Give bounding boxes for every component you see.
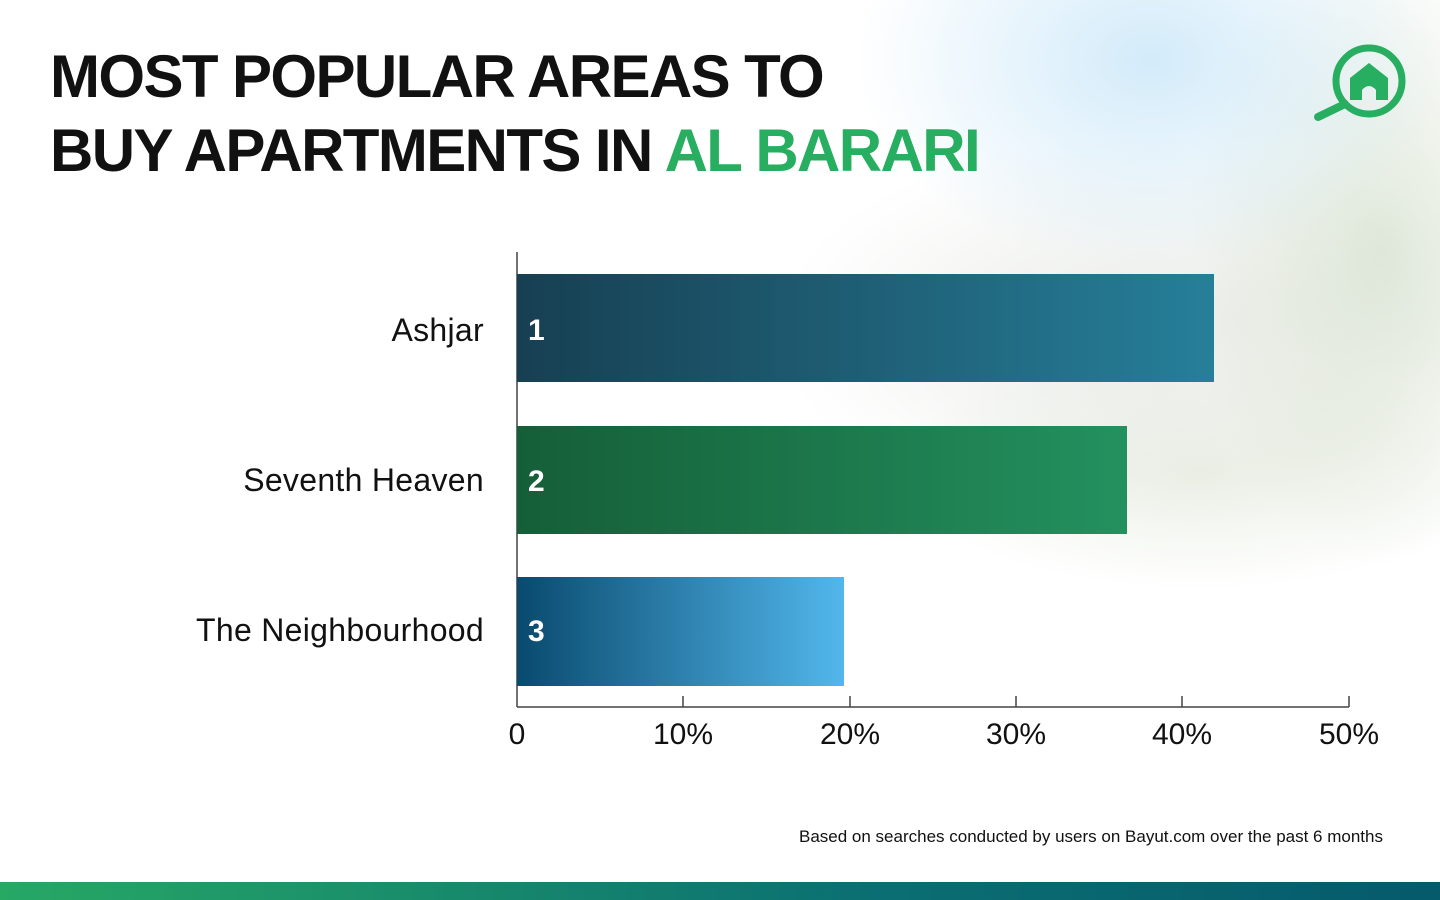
bottom bar: [0, 882, 1440, 900]
bar chart: Seventh Heaven: [243, 462, 484, 498]
title: BUY APARTMENTS IN AL BARARI: [50, 117, 979, 184]
bar chart: [196, 252, 1379, 750]
bar chart: Ashjar: [391, 312, 484, 348]
footnote: Based on searches conducted by users on Bayut.com over the past 6 months: [799, 827, 1383, 846]
bar chart: 2: [528, 465, 545, 498]
title: MOST POPULAR AREAS TO: [50, 43, 823, 110]
bar chart: 3: [528, 615, 545, 648]
title: [50, 43, 979, 184]
bar chart: 1: [528, 314, 545, 347]
icon: logo magnifier house: [1314, 44, 1406, 121]
bar chart: The Neighbourhood: [196, 612, 484, 648]
